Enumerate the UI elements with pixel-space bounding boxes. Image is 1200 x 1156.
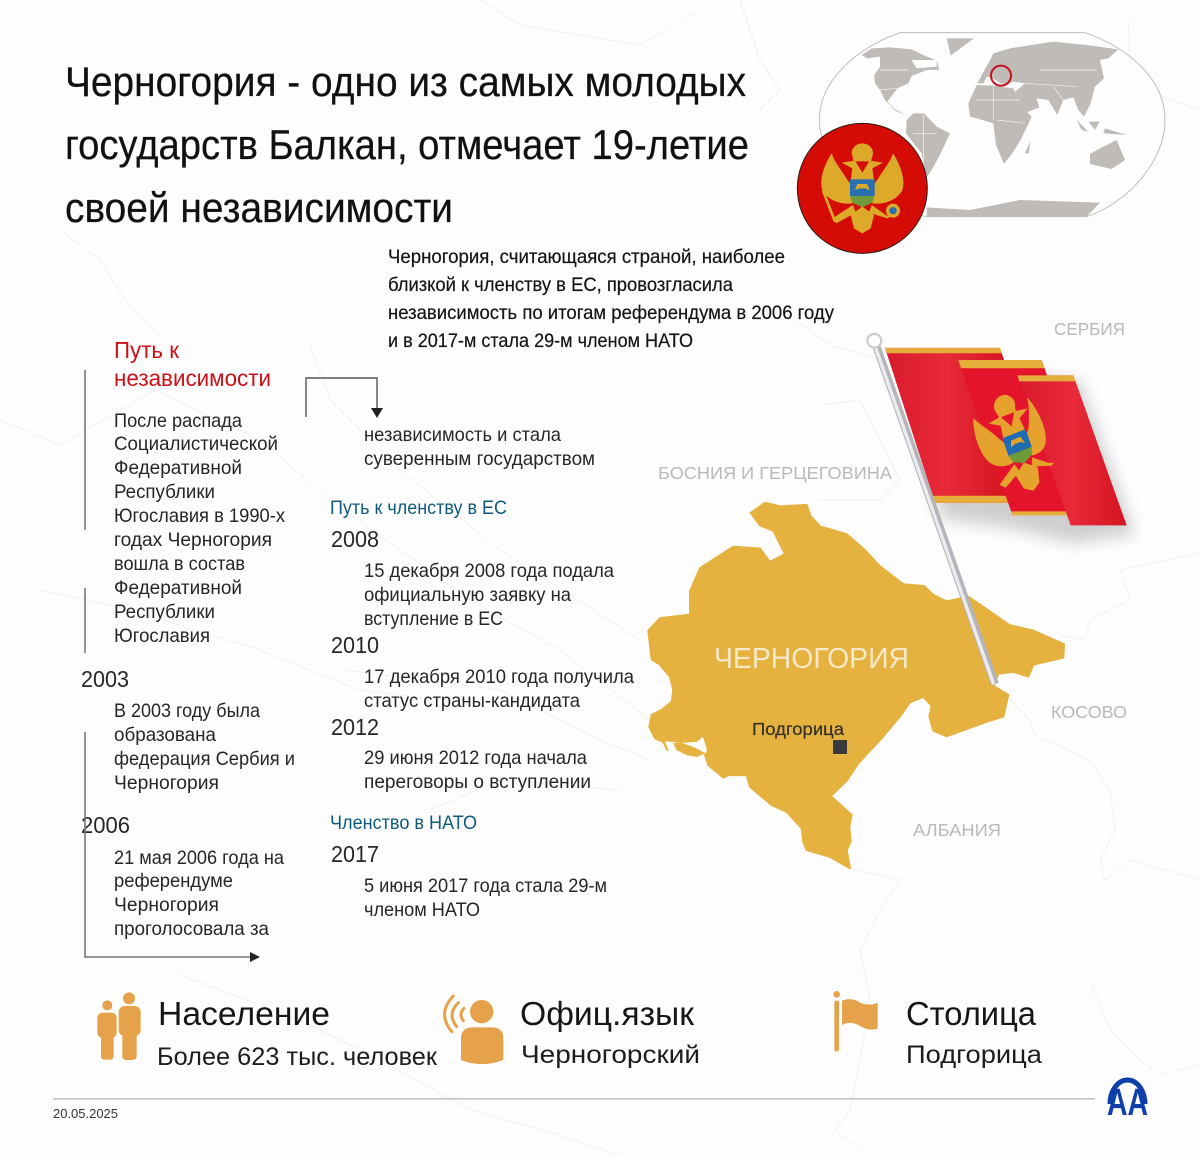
- title: Черногория - одно из самых молодых: [65, 58, 746, 105]
- map of Montenegro: [648, 503, 1064, 868]
- text: Yugoslavia: Республики: [114, 601, 215, 623]
- stat: population: Более 623 тыс. человек: [157, 1043, 438, 1071]
- locator ring: [991, 66, 1011, 86]
- flag pole: [867, 334, 995, 684]
- date: 20.05.2025: [53, 1106, 118, 1121]
- intro paragraph: и в 2017-м стала 29-м членом НАТО: [388, 330, 693, 352]
- timeline axis arrow: [85, 370, 260, 962]
- text: 2008: 15 декабря 2008 года подала: [364, 560, 614, 582]
- stat: capital: Подгорица: [906, 1041, 1042, 1069]
- icon: population: [97, 992, 141, 1060]
- text: 2012: переговоры о вступлении: [364, 771, 591, 793]
- left column: path to independence: [81, 337, 295, 940]
- text: 2008: официальную заявку на: [364, 584, 571, 606]
- text: 2006: проголосовала за: [114, 918, 269, 940]
- heading: path to independence: независимости: [114, 365, 271, 391]
- year 2008: 2008: [331, 526, 379, 552]
- capital marker: [752, 719, 847, 754]
- eagle emblem: [821, 143, 903, 233]
- text: sovereign state: независимость и стала: [364, 424, 561, 446]
- stat: capital: Столица: [906, 995, 1037, 1032]
- stat: population: Население: [158, 995, 330, 1032]
- map labels: СЕРБИЯ: [1054, 319, 1125, 339]
- text: Yugoslavia: годах Черногория: [114, 529, 272, 551]
- text: 2006: 21 мая 2006 года на: [114, 847, 284, 869]
- text: Yugoslavia: Югославия: [114, 625, 210, 647]
- right column: timeline: [330, 424, 634, 921]
- map labels: БОСНИЯ И ГЕРЦЕГОВИНА: [658, 463, 892, 483]
- map labels: КОСОВО: [1051, 702, 1127, 722]
- text: Yugoslavia: [114, 410, 285, 647]
- stat: language: Черногорский: [521, 1041, 700, 1069]
- flag emblem: [966, 385, 1062, 504]
- title: [65, 58, 749, 231]
- title: своей независимости: [65, 184, 453, 231]
- world map locator: [819, 33, 1165, 217]
- text: 2003: Черногория: [114, 772, 219, 794]
- stat: language: Офиц.язык: [520, 995, 695, 1032]
- text: 2003: образована: [114, 724, 216, 746]
- intro paragraph: Черногория, считающаяся страной, наиболее: [388, 246, 785, 268]
- waving flag on pole: [867, 334, 1135, 684]
- text: Yugoslavia: Федеративной: [114, 457, 242, 479]
- stat: population: [157, 995, 438, 1071]
- year 2010: 2010: [331, 632, 379, 658]
- text: Yugoslavia: вошла в состав: [114, 553, 245, 575]
- year 2006: 2006: [81, 812, 130, 838]
- text: 2010: [364, 666, 634, 712]
- icon: capital flag: [833, 991, 878, 1051]
- footer rule: [53, 1098, 1095, 1100]
- heading: NATO membership: Членство в НАТО: [330, 812, 477, 834]
- heading: path to independence: [114, 337, 271, 391]
- connector arrow: [306, 378, 383, 418]
- year 2017: 2017: [331, 841, 379, 867]
- text: Yugoslavia: Югославия в 1990-х: [114, 505, 285, 527]
- heading: EU membership: Путь к членству в ЕС: [330, 497, 507, 519]
- text: Yugoslavia: Федеративной: [114, 577, 242, 599]
- map labels: АЛБАНИЯ: [913, 820, 1001, 840]
- stat: capital: [906, 995, 1042, 1069]
- text: Yugoslavia: Республики: [114, 481, 215, 503]
- text: Yugoslavia: Социалистической: [114, 433, 278, 455]
- text: 2017: членом НАТО: [364, 899, 480, 921]
- icon: language speaker: [445, 996, 503, 1064]
- stat: language: [520, 995, 700, 1069]
- text: 2003: федерация Сербия и: [114, 748, 295, 770]
- logo: AA: AA: [1107, 1082, 1148, 1124]
- text: 2017: 5 июня 2017 года стала 29-м: [364, 875, 607, 897]
- year 2003: 2003: [81, 666, 129, 692]
- text: 2008: [364, 560, 614, 630]
- text: 2003: [114, 700, 295, 794]
- text: 2006: [114, 847, 284, 940]
- intro paragraph: независимость по итогам референдума в 2006 году: [388, 302, 834, 324]
- text: 2006: Черногория: [114, 894, 219, 916]
- text: 2003: В 2003 году была: [114, 700, 260, 722]
- intro paragraph: [388, 246, 834, 352]
- text: 2010: 17 декабря 2010 года получила: [364, 666, 634, 688]
- intro paragraph: близкой к членству в ЕС, провозгласила: [388, 274, 733, 296]
- year 2012: 2012: [331, 714, 379, 740]
- round flag of Montenegro: [797, 123, 927, 253]
- text: 2017: [364, 875, 607, 921]
- text: 2012: 29 июня 2012 года начала: [364, 747, 587, 769]
- text: 2006: референдуме: [114, 870, 233, 892]
- capital marker: Подгорица: [752, 719, 844, 739]
- map labels: [658, 319, 1127, 840]
- text: sovereign state: суверенным государством: [364, 448, 595, 470]
- heading: path to independence: Путь к: [114, 337, 180, 363]
- text: 2010: статус страны-кандидата: [364, 690, 580, 712]
- text: 2012: [364, 747, 591, 793]
- text: Yugoslavia: После распада: [114, 410, 242, 432]
- title: государств Балкан, отмечает 19-летие: [65, 121, 749, 168]
- text: sovereign state: [364, 424, 595, 470]
- map labels: ЧЕРНОГОРИЯ: [714, 643, 909, 675]
- text: 2008: вступление в ЕС: [364, 608, 503, 630]
